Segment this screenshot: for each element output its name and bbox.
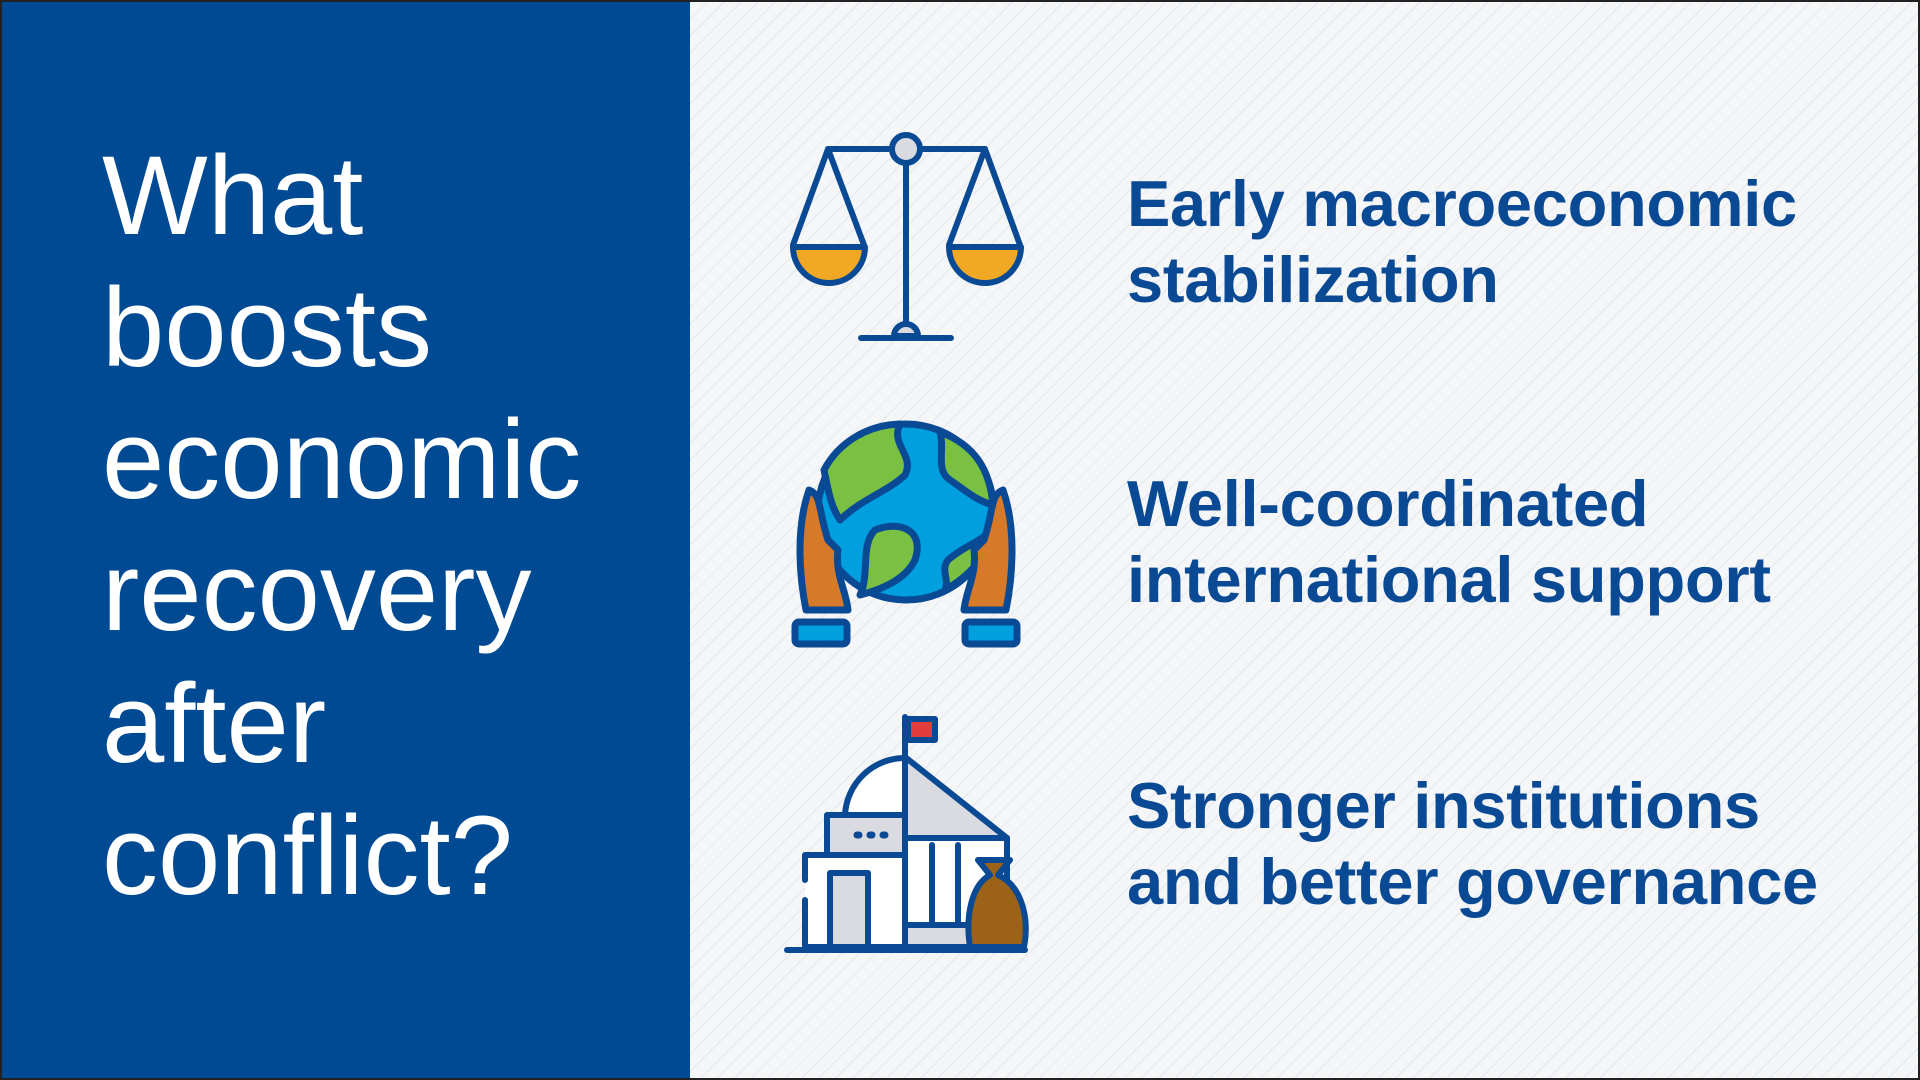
item: international support: international support: [1127, 543, 1771, 616]
title: What: [102, 133, 363, 258]
item: international support: [1127, 467, 1771, 616]
panel: left blue: [0, 0, 690, 1080]
title: after: [102, 661, 326, 786]
title: [102, 133, 581, 918]
title: recovery: [102, 529, 531, 654]
item: international support: Well-coordinated: [1127, 467, 1648, 540]
item: early stabilization: Early macroeconomic: [1127, 167, 1797, 240]
icon: scales: [790, 132, 1024, 341]
icon: globe in hands: [792, 420, 1020, 648]
title: boosts: [102, 265, 432, 390]
item: early stabilization: stabilization: [1127, 243, 1499, 316]
item: institutions: [1127, 769, 1818, 918]
item: institutions: Stronger institutions: [1127, 769, 1760, 842]
item: early stabilization: [1127, 167, 1797, 316]
title: economic: [102, 397, 581, 522]
title: conflict?: [102, 793, 513, 918]
item: institutions: and better governance: [1127, 845, 1818, 918]
icon: institution building: [784, 714, 1029, 953]
